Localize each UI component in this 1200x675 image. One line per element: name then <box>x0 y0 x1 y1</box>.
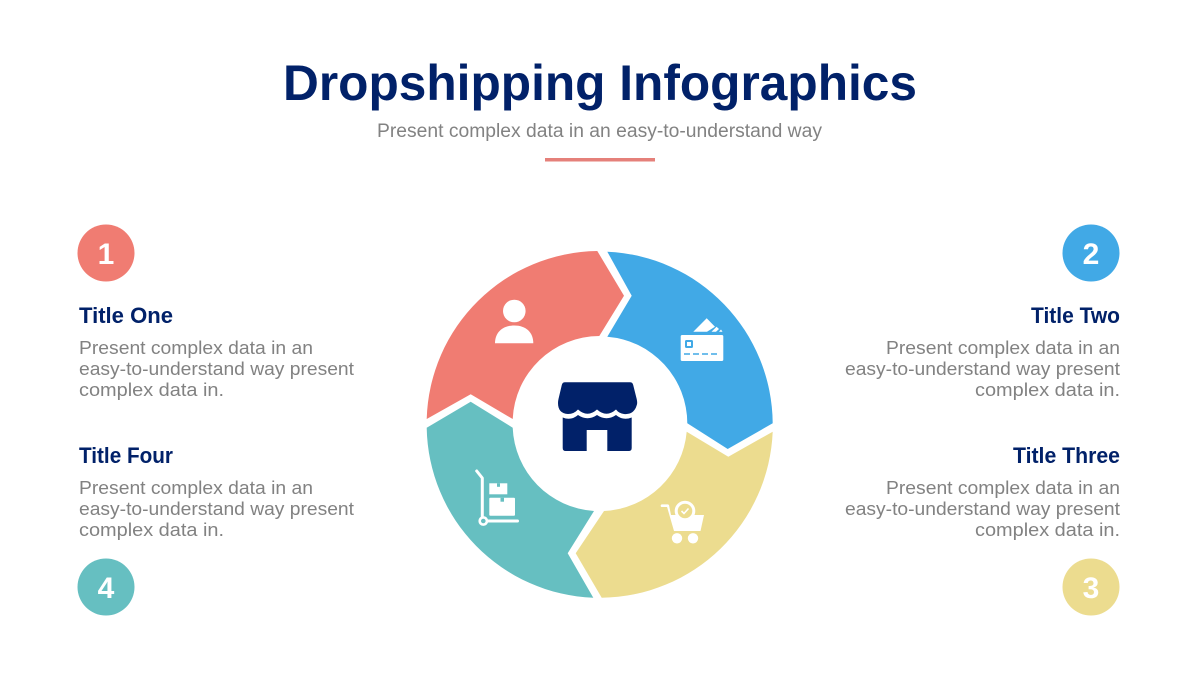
title underline <box>545 158 655 162</box>
segment: red arrow <box>427 251 624 419</box>
title: Dropshipping Infographics <box>283 55 917 111</box>
badge 1: 1 <box>98 238 114 271</box>
text block: item three: Present complex data in an <box>886 478 1120 498</box>
segment: blue arrow <box>607 252 773 449</box>
segment: yellow arrow <box>576 432 773 598</box>
text block: item three <box>845 478 1120 540</box>
panel: item four <box>78 443 354 616</box>
text block: item four: Present complex data in an <box>79 478 313 498</box>
segment: teal arrow <box>427 402 594 598</box>
panel: item three <box>845 443 1120 616</box>
text block: item one <box>79 338 354 400</box>
text block: item two <box>845 338 1120 400</box>
icon: person <box>495 300 533 343</box>
icon: credit card <box>681 318 723 361</box>
text block: item four: easy-to-understand way present <box>79 499 354 519</box>
badge 1 <box>78 224 134 282</box>
heading: title three: Title Three <box>1013 443 1120 468</box>
text block: item one: Present complex data in an <box>79 338 313 358</box>
text block: item two: Present complex data in an <box>886 338 1120 358</box>
badge 4: 4 <box>98 572 115 605</box>
chart: circular arrow cycle <box>427 251 773 598</box>
panel: item one <box>78 224 354 400</box>
panel: item two <box>845 224 1120 400</box>
text block: item one: complex data in. <box>79 380 224 400</box>
text block: item four <box>79 478 354 540</box>
icon: hand truck with boxes <box>477 471 518 525</box>
badge 2 <box>1062 224 1120 282</box>
text block: item two: easy-to-understand way present <box>845 359 1120 379</box>
subtitle: Present complex data in an easy-to-understand way <box>377 121 822 142</box>
text block: item four: complex data in. <box>79 520 224 540</box>
text block: item three: complex data in. <box>975 520 1120 540</box>
icon: shopping cart with check <box>662 501 704 544</box>
heading: title two: Title Two <box>1031 303 1120 328</box>
badge 2: 2 <box>1083 238 1099 271</box>
text block: item three: easy-to-understand way present <box>845 499 1120 519</box>
text block: item one: easy-to-understand way present <box>79 359 354 379</box>
badge 4 <box>78 558 134 616</box>
badge 3: 3 <box>1083 572 1099 605</box>
icon: storefront <box>558 382 637 451</box>
heading: title four: Title Four <box>79 443 173 468</box>
badge 3 <box>1062 558 1120 616</box>
heading: title one: Title One <box>79 303 173 328</box>
text block: item two: complex data in. <box>975 380 1120 400</box>
